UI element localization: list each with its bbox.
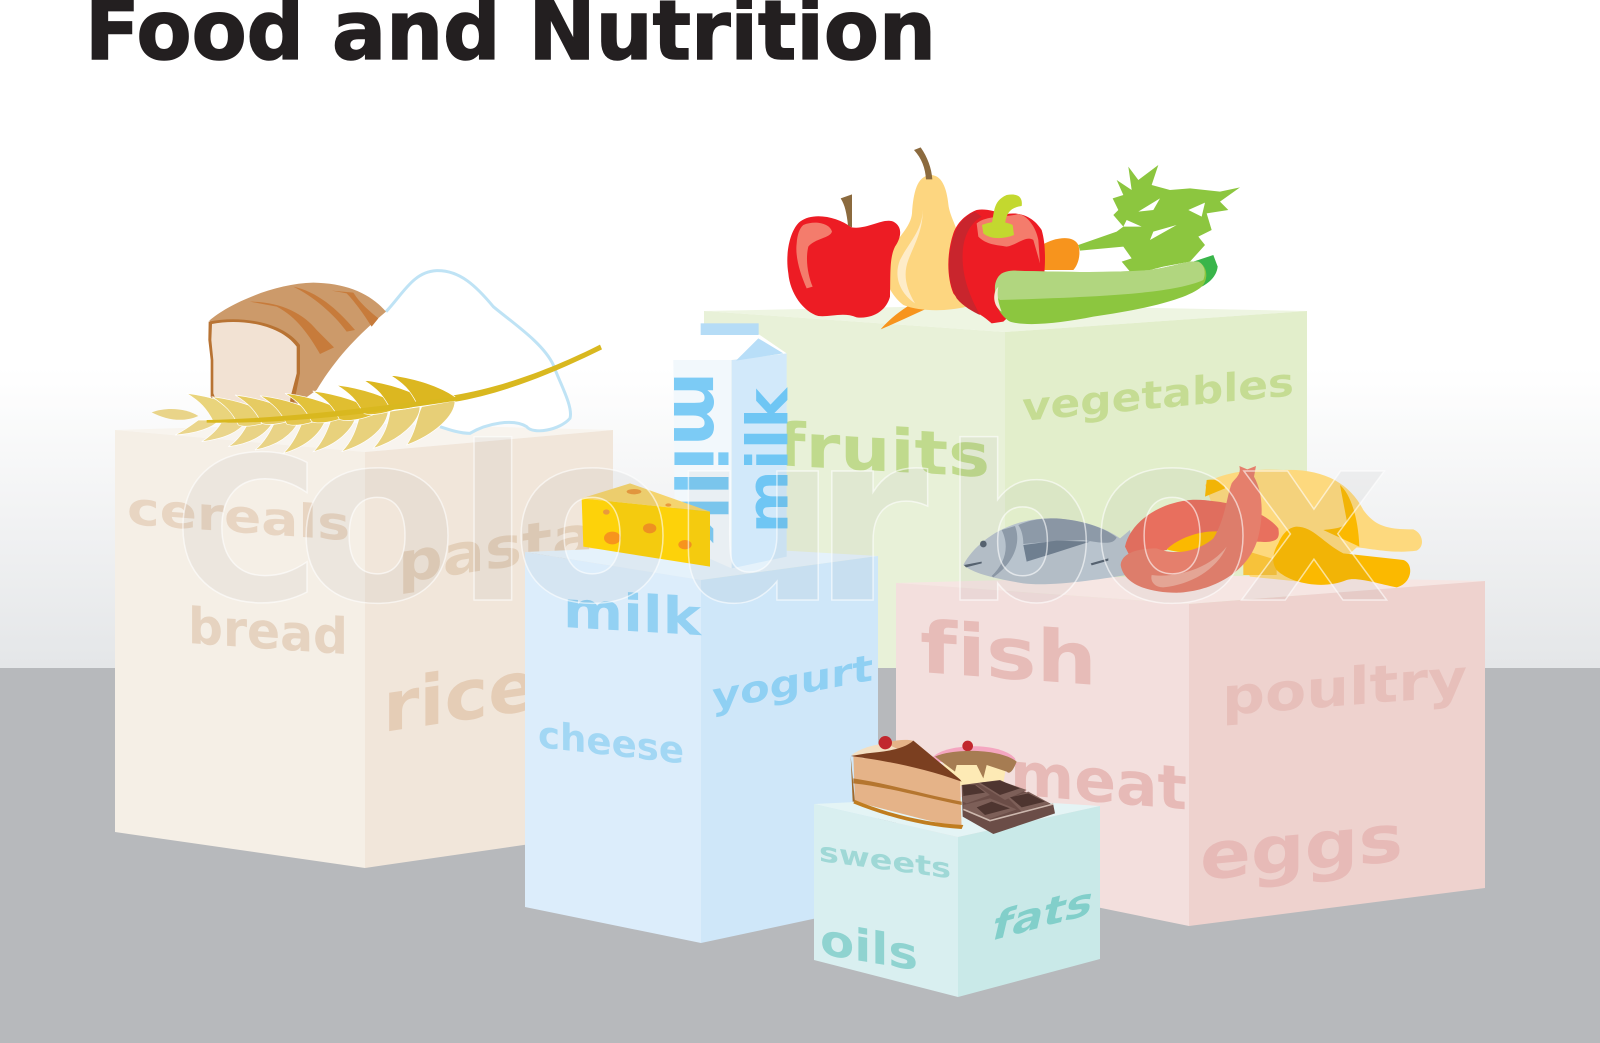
icon: milk carton [657, 323, 801, 568]
watermark: colourbox: l [456, 400, 530, 651]
icon: cheese wedge [582, 483, 710, 567]
label: cereals: cereals [127, 481, 350, 551]
icon: bread loaf [208, 283, 386, 413]
watermark: colourbox: b [942, 400, 1096, 651]
icon: red pepper [948, 194, 1045, 323]
icon: fish [963, 518, 1137, 584]
carton text: front: milk [734, 386, 801, 533]
panel: dairy box [525, 545, 878, 943]
label: rice: rice [383, 644, 538, 749]
icon: flour pile [317, 271, 571, 433]
label: pasta: pasta [398, 503, 594, 597]
label: poultry: poultry [1222, 649, 1467, 728]
panel: protein box [896, 575, 1485, 926]
watermark: colourbox: ox [1091, 381, 1390, 656]
label: yogurt: yogurt [712, 645, 873, 719]
floor [0, 668, 1600, 1043]
icon: sausage [1121, 466, 1279, 593]
label: meat: meat [1010, 739, 1187, 824]
illustration: bread, flour and wheat [152, 271, 602, 453]
watermark: colourbox: our [511, 381, 928, 656]
label: cheese: cheese [538, 713, 684, 773]
label: bread: bread [188, 597, 348, 666]
icon: pear [884, 147, 967, 310]
label: milk: milk [563, 581, 702, 648]
panel: grains box [115, 423, 613, 868]
label: fruits: fruits [775, 410, 990, 492]
illustration: cake and chocolate [851, 736, 1055, 834]
icon: carrot greens [1078, 165, 1240, 272]
icon: zucchini [994, 255, 1218, 324]
watermark: colourbox: o [296, 381, 458, 656]
carton text: side: milk [657, 372, 741, 546]
panel: sweets and fats box [814, 797, 1100, 997]
label: eggs: eggs [1200, 800, 1403, 896]
label: sweets: sweets [819, 837, 951, 885]
icon: cake slice [851, 736, 963, 829]
illustration: milk carton and cheese [582, 323, 801, 568]
background wall [0, 0, 1600, 668]
icon: carrot [881, 238, 1079, 329]
icon: wheat stalk [152, 345, 602, 453]
label: vegetables: vegetables [1022, 360, 1294, 431]
icon: chicken [1205, 470, 1422, 587]
icon: cupcake [933, 741, 1017, 787]
icon: apple [787, 194, 900, 318]
watermark: colourbox: C [173, 415, 320, 648]
illustration: fish, sausage and chicken [963, 466, 1422, 593]
illustration: fruits and vegetables [787, 147, 1240, 329]
label: fish: fish [920, 606, 1097, 703]
icon: chocolate bar [962, 780, 1055, 834]
label: fats: fats [988, 876, 1099, 951]
panel: fruits and vegetables box [704, 305, 1307, 668]
label: oils: oils [820, 914, 918, 981]
